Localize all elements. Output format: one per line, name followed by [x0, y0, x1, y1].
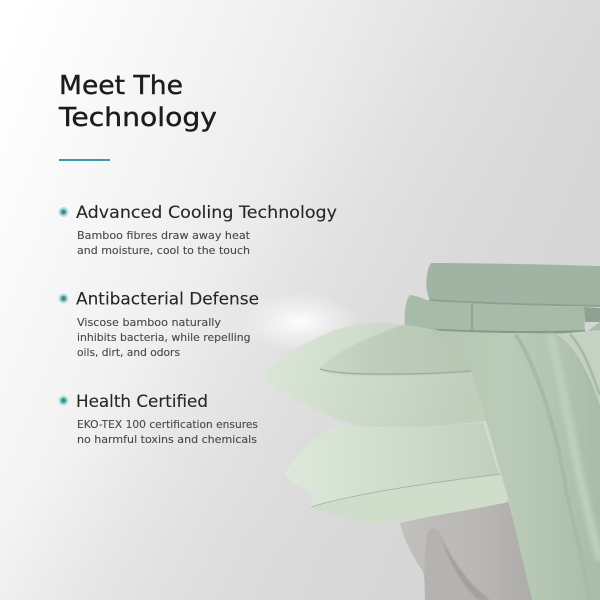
folded sheet: second: [405, 295, 600, 333]
title: Meet The: [59, 71, 183, 101]
feature: antibacterial defense: [58, 290, 259, 359]
heading: health certified: Health Certified: [76, 392, 208, 411]
lower pillow: [285, 423, 508, 523]
text: antibacterial description: [77, 316, 250, 359]
text: health certified description: EKO-TEX 100 certification ensures: [77, 418, 258, 431]
text: health certified description: [77, 418, 258, 446]
text: antibacterial description: Viscose bamboo naturally: [77, 316, 221, 329]
text: antibacterial description: oils, dirt, and odors: [77, 346, 180, 359]
product photo: bedding stack: [262, 263, 600, 600]
feature: advanced cooling: [58, 203, 337, 257]
icon: bullet dot: [58, 294, 68, 304]
icon: bullet dot: [58, 207, 68, 217]
draped sheet: [430, 322, 600, 600]
text: antibacterial description: inhibits bacteria, while repelling: [77, 331, 250, 344]
text: advanced cooling description: Bamboo fibres draw away heat: [77, 229, 251, 242]
heading: advanced cooling: Advanced Cooling Technology: [76, 203, 337, 222]
heading: antibacterial defense: Antibacterial Defense: [76, 290, 259, 308]
icon: bullet dot: [58, 396, 68, 406]
title: Technology: [58, 103, 217, 133]
text: advanced cooling description: [77, 229, 251, 257]
stone stool: [400, 500, 534, 600]
text: advanced cooling description: and moisture, cool to the touch: [77, 244, 250, 257]
accent divider: [59, 159, 110, 161]
folded sheet: top: [426, 263, 600, 307]
text: health certified description: no harmful toxins and chemicals: [77, 433, 257, 446]
feature: health certified: [58, 392, 258, 446]
upper pillow: [262, 323, 487, 427]
title: [58, 71, 217, 133]
